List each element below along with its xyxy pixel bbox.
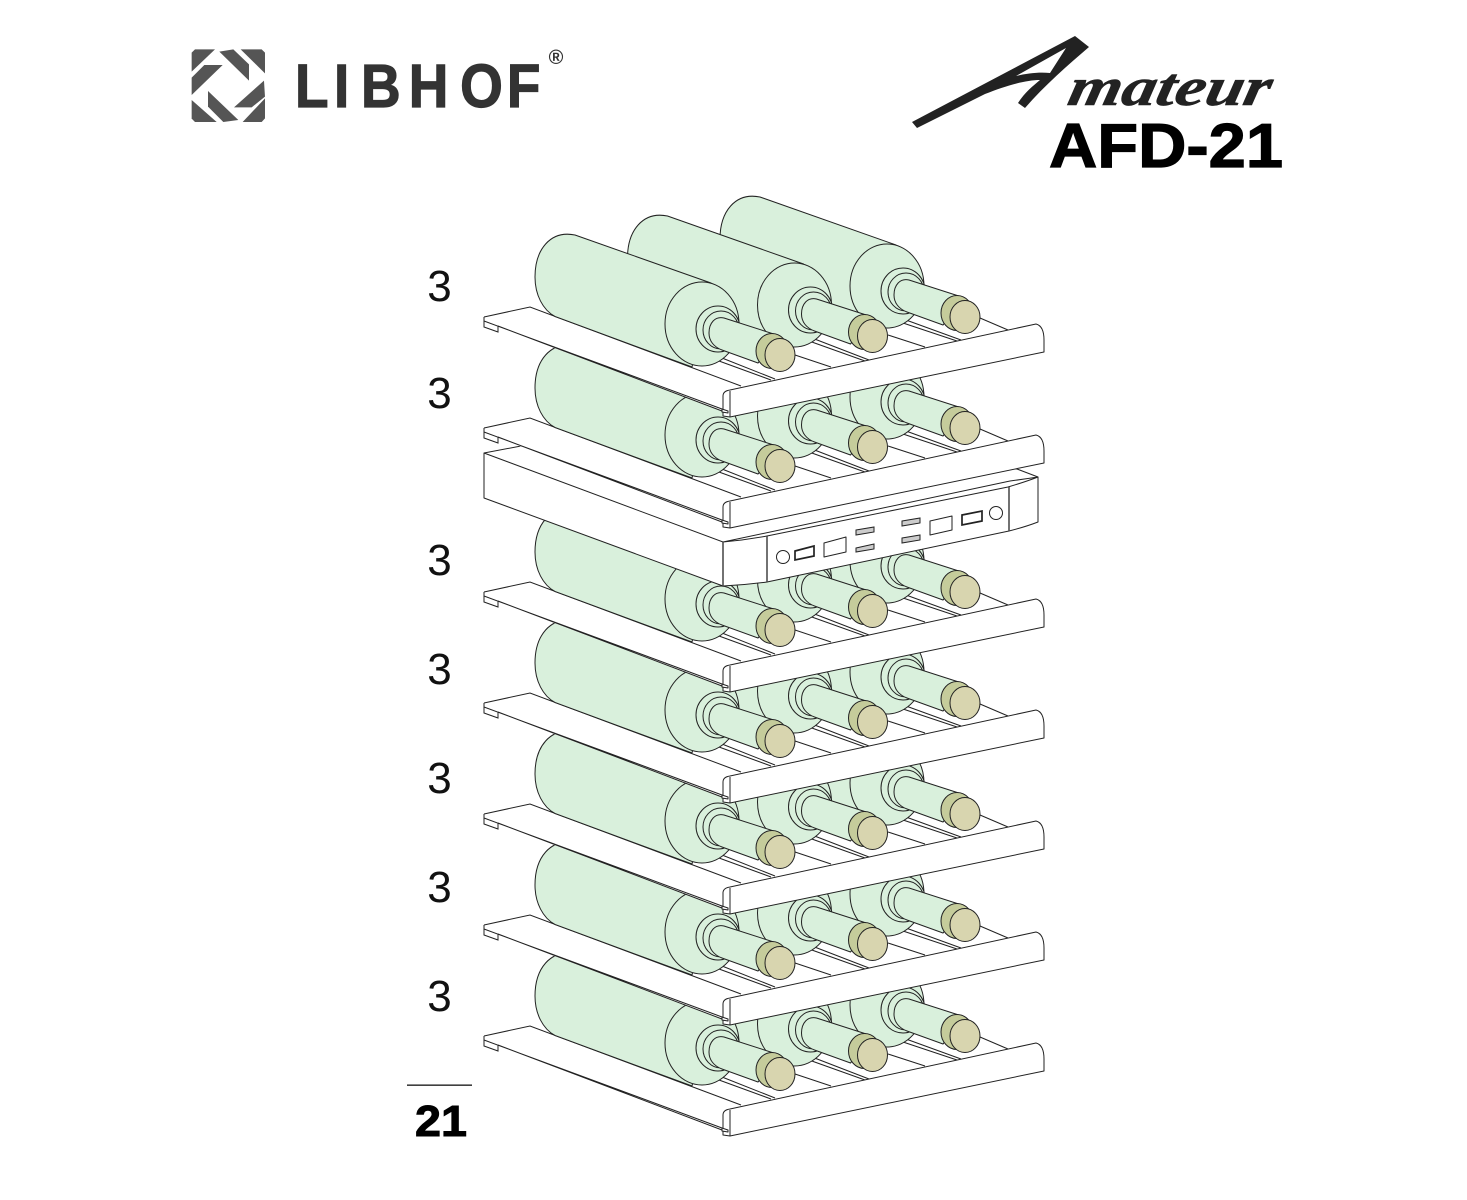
display [824,537,846,557]
shelf row 6 [484,804,1044,1025]
shelf front bar [722,710,1044,803]
bottle middle [628,490,888,628]
bottle middle [628,215,888,352]
bottle front [535,345,795,482]
shelf row 5 [484,693,1044,914]
shelf front bar [722,435,1044,528]
bottle middle [628,326,888,464]
panel face dividers [723,487,1009,586]
shelf row 1 [484,196,1044,417]
logo: Libhof [192,47,564,122]
bottle back [720,196,980,334]
bottle front [535,620,795,758]
control panel [484,446,1038,586]
bottle front [535,842,795,980]
total [407,1084,472,1146]
shelf plate [484,307,1044,417]
bottle middle [628,601,888,738]
logo: Amateur AFD-21 [912,36,1283,181]
bottle back [720,693,980,830]
bottle back [720,804,980,942]
count row 2: 3 [427,369,452,418]
swoosh counter of the script A [1016,48,1066,76]
bottle front [535,234,795,372]
panel body [484,446,1038,586]
bottle back [720,471,980,608]
slot [856,544,874,552]
shelf row 4 [484,582,1044,803]
bottle front [535,509,795,646]
bottle middle [628,934,888,1072]
total rule [407,1084,472,1086]
swoosh stroke of the script A [912,36,1089,128]
row counts [427,262,452,1021]
shelf row 3 [484,471,1044,692]
display right [962,511,982,525]
icon: Libhof square pinwheel [192,49,265,122]
shelf front bar [722,932,1044,1025]
bottle back [720,915,980,1052]
bottle back [720,582,980,720]
shelf front bar [722,821,1044,914]
count row 7: 3 [427,972,452,1021]
bottle back [720,307,980,444]
shelf row 7 [484,915,1044,1136]
registered mark: ® [549,47,564,69]
shelf plate [484,582,1044,692]
count row 4: 3 [427,645,452,694]
shelf plate [484,915,1044,1025]
shelf front bar [722,1043,1044,1136]
count row 3: 3 [427,536,452,585]
display [930,516,952,535]
shelf plate [484,418,1044,528]
bottle front [535,731,795,868]
script wordmark: Amateur: mateur [1063,58,1279,117]
shelf plate [484,1026,1044,1136]
count row 5: 3 [427,754,452,803]
slot [902,535,920,543]
slot [902,518,920,526]
total value: 21 [415,1097,467,1146]
bottle middle [628,823,888,960]
model name: AFD-21 [1049,112,1283,181]
knob left [776,550,790,564]
count row 1: 3 [427,262,452,311]
slot [856,527,874,535]
shelf plate [484,804,1044,914]
shelf front bar [722,324,1044,417]
panel edge lines [484,453,1038,542]
shelf plate [484,693,1044,803]
count row 6: 3 [427,863,452,912]
shelf row 2 [484,307,1044,528]
knob right [990,506,1002,520]
bottle front [535,953,795,1090]
shelf front bar [722,599,1044,692]
display left [795,546,814,560]
bottle middle [628,712,888,850]
wordmark: LIBHOF: LIBHOF [295,52,540,121]
